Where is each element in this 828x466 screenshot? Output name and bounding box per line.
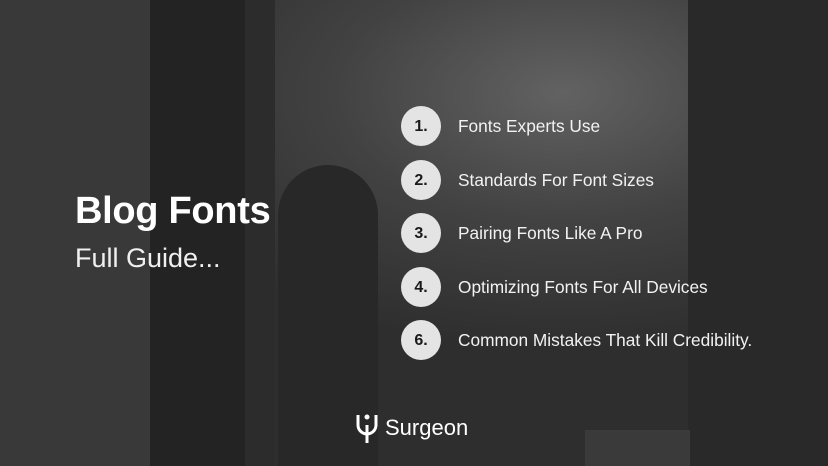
list item 2: 2.	[414, 172, 428, 189]
list item 6: 6.	[414, 332, 428, 349]
list item 3: Pairing Fonts Like A Pro	[458, 222, 642, 242]
subtitle: Full Guide...	[75, 243, 221, 273]
list item 6	[401, 320, 752, 360]
list item 3	[401, 213, 642, 253]
title: Blog Fonts	[75, 190, 270, 232]
list item 2: Standards For Font Sizes	[458, 170, 654, 190]
list item 6: Common Mistakes That Kill Credibility.	[458, 330, 752, 350]
list item 4: 4.	[414, 279, 428, 296]
list item 1: 1.	[414, 118, 428, 135]
list item 3: 3.	[414, 225, 428, 242]
list item 1	[401, 106, 600, 146]
list item 2	[401, 160, 654, 200]
list item 4	[401, 267, 708, 307]
list item 4: Optimizing Fonts For All Devices	[458, 276, 708, 296]
list item 1: Fonts Experts Use	[458, 116, 600, 136]
icon: logo mark	[356, 414, 378, 443]
logo: Surgeon	[385, 415, 468, 440]
logo	[356, 414, 468, 443]
